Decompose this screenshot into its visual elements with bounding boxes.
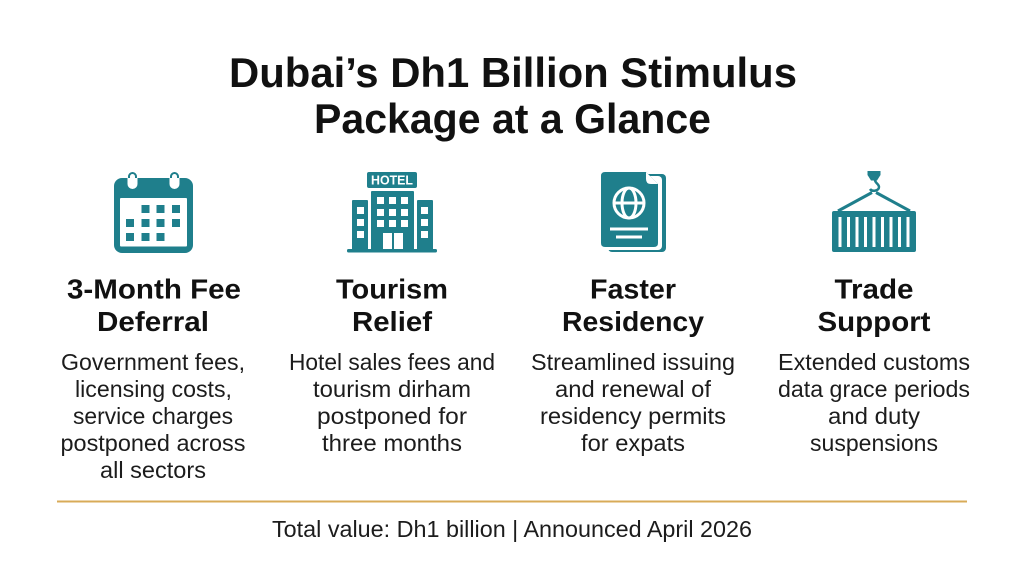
heading: fee deferral: Deferral: [97, 306, 209, 337]
text: faster residency description: [531, 349, 735, 456]
text: trade support description: and duty: [828, 403, 921, 429]
heading: fee deferral: 3-Month Fee: [67, 274, 241, 304]
icon: cargo container: [832, 171, 916, 252]
text: fee deferral description: all sectors: [100, 457, 206, 483]
text: trade support description: suspensions: [810, 430, 938, 456]
text: trade support description: data grace periods: [778, 376, 970, 402]
heading: tourism relief: Relief: [352, 306, 433, 337]
text: trade support description: Extended customs: [778, 349, 970, 375]
title: Package at a Glance: [314, 95, 711, 142]
heading: faster residency: [562, 274, 704, 337]
heading: faster residency: Faster: [590, 274, 676, 304]
text: tourism relief description: Hotel sales fees and: [289, 349, 495, 375]
heading: fee deferral: [67, 274, 241, 337]
heading: faster residency: Residency: [562, 306, 704, 337]
text: fee deferral description: postponed across: [60, 430, 246, 456]
icon: calendar: [114, 172, 193, 253]
text: faster residency description: Streamlined issuing: [531, 349, 735, 375]
text: tourism relief description: [289, 349, 495, 456]
panel: fee deferral: [60, 172, 246, 483]
panel: tourism relief: [289, 172, 495, 456]
icon: hotel: [347, 172, 437, 252]
text: fee deferral description: service charges: [73, 403, 233, 429]
heading: trade support: Support: [818, 306, 930, 337]
text: faster residency description: for expats: [581, 430, 685, 456]
text: tourism relief description: tourism dirham: [313, 376, 471, 402]
text: tourism relief description: three months: [322, 430, 462, 456]
icon: passport: [601, 172, 666, 252]
panel: faster residency: [531, 172, 735, 456]
text: faster residency description: residency permits: [540, 403, 726, 429]
text: trade support description: [778, 349, 970, 456]
heading: tourism relief: [336, 274, 448, 337]
heading: trade support: [818, 274, 930, 337]
text: fee deferral description: [60, 349, 246, 483]
title: Dubai’s Dh1 Billion Stimulus: [229, 49, 797, 96]
text: tourism relief description: postponed for: [317, 403, 467, 429]
icon: hotel: HOTEL: [371, 172, 413, 188]
text: fee deferral description: Government fees,: [61, 349, 245, 375]
heading: tourism relief: Tourism: [336, 274, 448, 304]
panel: trade support: [778, 171, 970, 456]
text: fee deferral description: licensing costs,: [75, 376, 232, 402]
heading: trade support: Trade: [834, 274, 914, 304]
title: [229, 49, 797, 142]
footer text: Total value: Dh1 billion | Announced April 2026: [272, 516, 752, 542]
text: faster residency description: and renewal of: [555, 376, 712, 402]
